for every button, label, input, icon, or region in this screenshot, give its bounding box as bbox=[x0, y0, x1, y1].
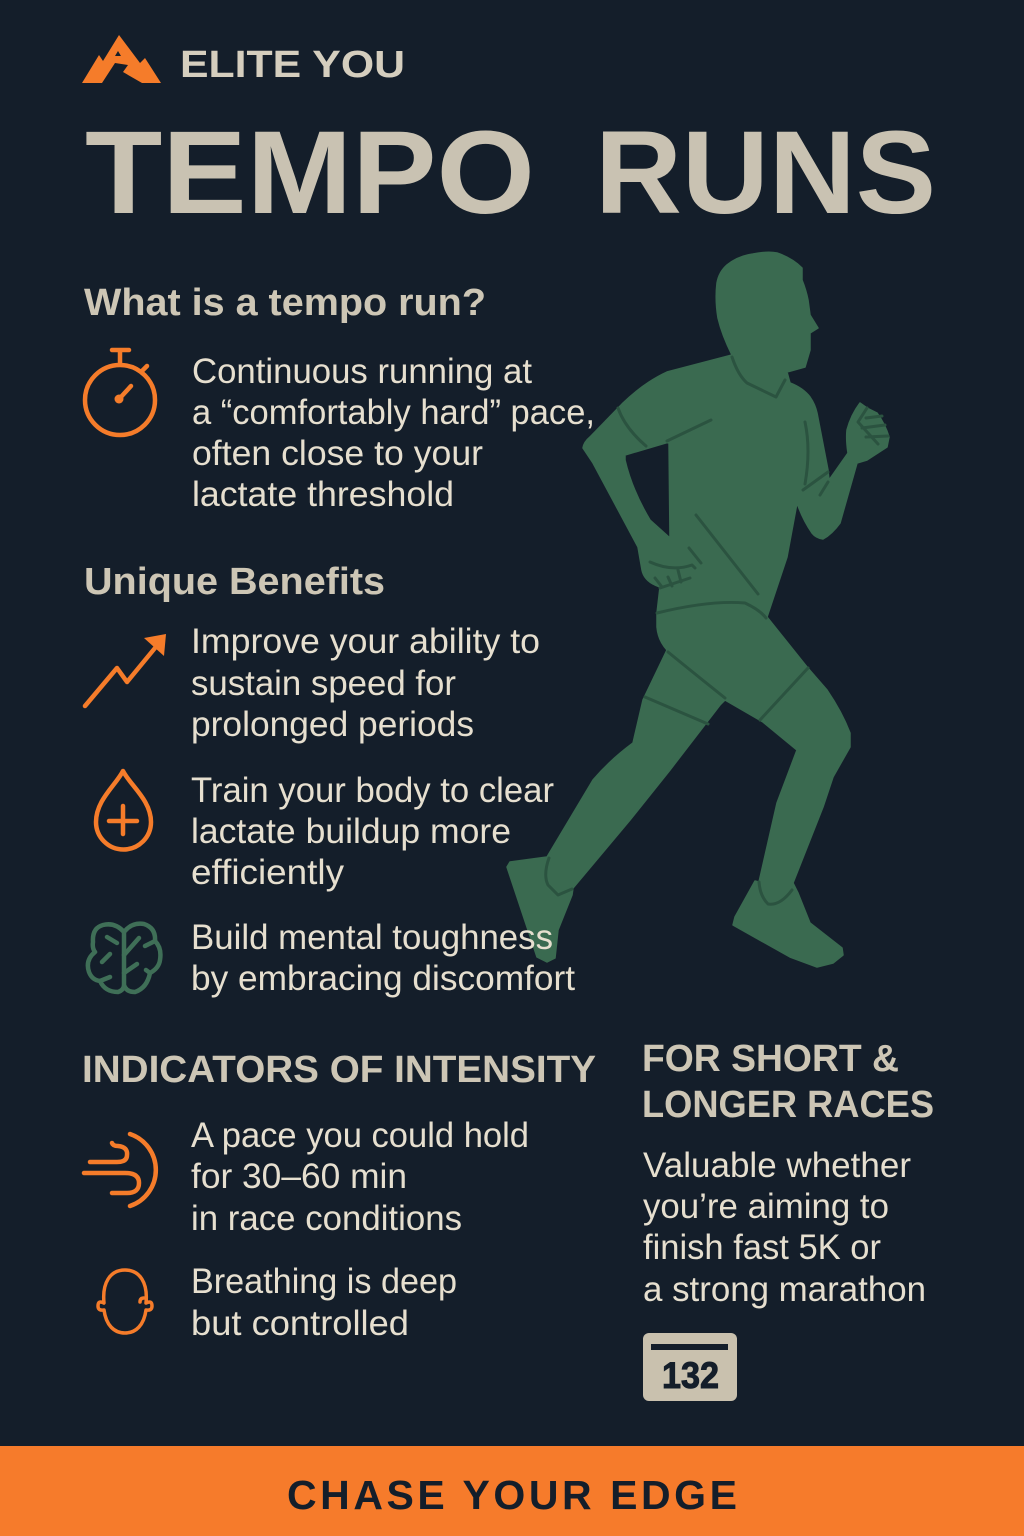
title: RUNS bbox=[595, 107, 936, 239]
title: TEMPO bbox=[85, 107, 535, 239]
section: indicators of intensity bbox=[82, 1049, 596, 1343]
description text: you’re aiming to bbox=[643, 1186, 889, 1226]
description text bbox=[643, 1145, 926, 1309]
logo bbox=[82, 35, 405, 86]
indicator: pace duration: A pace you could hold bbox=[191, 1115, 529, 1155]
section: for short and longer races bbox=[642, 1038, 934, 1401]
benefit: clear lactate bbox=[191, 770, 554, 892]
benefit: sustain speed: Improve your ability to bbox=[191, 621, 540, 661]
heading: for short and longer races: LONGER RACES bbox=[642, 1084, 934, 1126]
icon: head breathing bbox=[98, 1270, 152, 1333]
icon: wind and pace arc bbox=[84, 1134, 156, 1206]
description text: often close to your bbox=[192, 433, 483, 473]
runner silhouette bbox=[507, 252, 889, 967]
icon: race bib 132: 132 bbox=[662, 1355, 719, 1396]
section: unique benefits bbox=[84, 561, 575, 998]
runner clothing lines bbox=[546, 357, 888, 904]
section: what is a tempo run bbox=[84, 282, 595, 514]
icon: race bib 132 bbox=[643, 1333, 737, 1401]
benefit: clear lactate: efficiently bbox=[191, 852, 344, 892]
benefit: clear lactate: Train your body to clear bbox=[191, 770, 554, 810]
benefit: mental toughness bbox=[191, 917, 575, 998]
icon: rising arrow bbox=[85, 634, 166, 706]
indicator: pace duration: for 30–60 min bbox=[191, 1156, 407, 1196]
indicator: pace duration: in race conditions bbox=[191, 1198, 462, 1238]
logo wordmark: ELITE YOU bbox=[180, 44, 405, 86]
heading: for short and longer races bbox=[642, 1038, 934, 1126]
footer banner bbox=[0, 1446, 1024, 1536]
description text bbox=[192, 351, 595, 514]
description text: a “comfortably hard” pace, bbox=[192, 392, 595, 432]
benefit: sustain speed: prolonged periods bbox=[191, 704, 474, 744]
heading: for short and longer races: FOR SHORT & bbox=[642, 1038, 899, 1080]
benefit: sustain speed: sustain speed for bbox=[191, 663, 456, 703]
description text: Valuable whether bbox=[643, 1145, 911, 1185]
heading: indicators of intensity: INDICATORS OF INTENSITY bbox=[82, 1049, 596, 1091]
title bbox=[85, 107, 936, 239]
description text: finish fast 5K or bbox=[643, 1227, 881, 1267]
logo mark bbox=[82, 35, 161, 83]
indicator: breathing: Breathing is deep bbox=[191, 1261, 457, 1301]
benefit: clear lactate: lactate buildup more bbox=[191, 811, 511, 851]
icon: droplet with plus bbox=[96, 771, 151, 849]
indicator: breathing bbox=[191, 1261, 457, 1343]
description text: a strong marathon bbox=[643, 1269, 926, 1309]
footer slogan: CHASE YOUR EDGE bbox=[287, 1472, 737, 1518]
indicator: pace duration bbox=[191, 1115, 529, 1238]
benefit: sustain speed bbox=[191, 621, 540, 744]
heading: what is a tempo run: What is a tempo run? bbox=[84, 282, 486, 324]
icon: stopwatch bbox=[85, 350, 155, 435]
benefit: mental toughness: by embracing discomfort bbox=[191, 958, 575, 998]
description text: Continuous running at bbox=[192, 351, 532, 391]
benefit: mental toughness: Build mental toughness bbox=[191, 917, 553, 957]
indicator: breathing: but controlled bbox=[191, 1303, 409, 1343]
description text: lactate threshold bbox=[192, 474, 454, 514]
heading: unique benefits: Unique Benefits bbox=[84, 561, 385, 603]
icon: brain bbox=[88, 924, 160, 992]
